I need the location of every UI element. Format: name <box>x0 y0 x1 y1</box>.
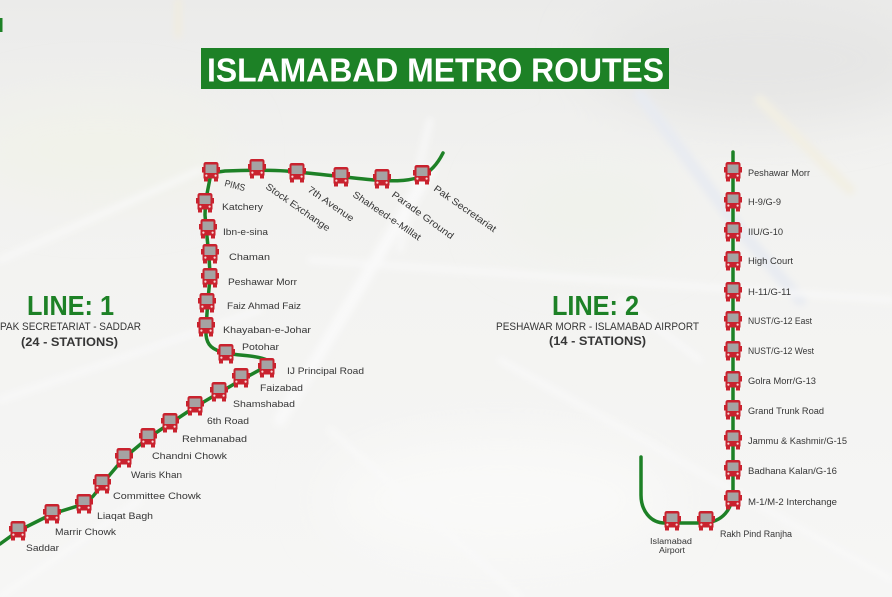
line 2 heading: (14 - STATIONS) <box>549 334 646 348</box>
line 2 station labels: Airport <box>659 546 686 555</box>
line 1 station labels: Pak Secretariat <box>431 183 499 235</box>
line 1 station labels: Parade Ground <box>389 190 456 242</box>
line 2 station labels: Jammu & Kashmir/G-15 <box>748 436 847 446</box>
line 2 station labels: Grand Trunk Road <box>748 406 824 416</box>
line 1 station labels: 7th Avenue <box>305 184 356 224</box>
line 1 heading: (24 - STATIONS) <box>21 335 118 349</box>
line 1 station labels: Katchery <box>222 202 263 213</box>
line 2 station labels: Rakh Pind Ranjha <box>720 529 792 539</box>
line 1 station labels: Waris Khan <box>131 470 182 481</box>
line 1 station labels: Stock Exchange <box>263 181 332 234</box>
line 1 bus stops <box>9 159 431 540</box>
line 2 station labels: M-1/M-2 Interchange <box>748 497 837 507</box>
line 2 route <box>641 152 733 523</box>
line 2 station labels: H-11/G-11 <box>748 287 791 297</box>
line 2 station labels <box>650 168 847 555</box>
title: ISLAMABAD METRO ROUTES <box>207 52 664 88</box>
line 2 station labels: NUST/G-12 West <box>748 346 814 356</box>
line 1 station labels: Committee Chowk <box>113 491 201 502</box>
line 2 station labels: Badhana Kalan/G-16 <box>748 466 837 476</box>
line 1 station labels: Shamshabad <box>233 399 295 410</box>
line 1 station labels: Ibn-e-sina <box>223 227 269 238</box>
line 1 heading: PAK SECRETARIAT - SADDAR <box>0 321 141 333</box>
line 1 station labels: PIMS <box>223 178 246 194</box>
line 1 station labels <box>26 178 499 554</box>
line 1 station labels: Faizabad <box>260 383 303 394</box>
line 1 station labels: Chandni Chowk <box>152 451 227 462</box>
line 2 station labels: NUST/G-12 East <box>748 316 812 326</box>
line 2 station labels: Peshawar Morr <box>748 168 810 178</box>
line 2 station labels: High Court <box>748 256 794 266</box>
line 1 station labels: Khayaban-e-Johar <box>223 325 311 336</box>
line 1 heading <box>0 290 141 349</box>
line 1 station labels: IJ Principal Road <box>287 366 364 377</box>
line 1 station labels: Peshawar Morr <box>228 277 297 288</box>
corner mark <box>0 18 2 32</box>
line 1 station labels: Chaman <box>229 252 270 263</box>
line 1 station labels: Rehmanabad <box>182 434 247 445</box>
line 1 station labels: Shaheed-e-Millat <box>350 189 423 243</box>
line 2 station labels: Golra Morr/G-13 <box>748 376 816 386</box>
line 1 station labels: Saddar <box>26 543 59 554</box>
line 2 station labels: IIU/G-10 <box>748 227 783 237</box>
line 1 route <box>0 153 443 544</box>
line 2 heading: LINE: 2 <box>552 290 639 321</box>
line 2 bus stops <box>663 162 742 530</box>
line 1 station labels: 6th Road <box>207 416 249 427</box>
line 1 heading: LINE: 1 <box>27 290 114 321</box>
line 2 station labels: H-9/G-9 <box>748 197 781 207</box>
line 1 station labels: Faiz Ahmad Faiz <box>227 301 301 312</box>
line 2 station labels: Islamabad <box>650 537 692 546</box>
line 1 station labels: Liaqat Bagh <box>97 511 153 522</box>
line 2 heading: PESHAWAR MORR - ISLAMABAD AIRPORT <box>496 321 699 333</box>
line 2 heading <box>496 290 699 348</box>
line 1 station labels: Marrir Chowk <box>55 527 116 538</box>
line 1 station labels: Potohar <box>242 342 279 353</box>
